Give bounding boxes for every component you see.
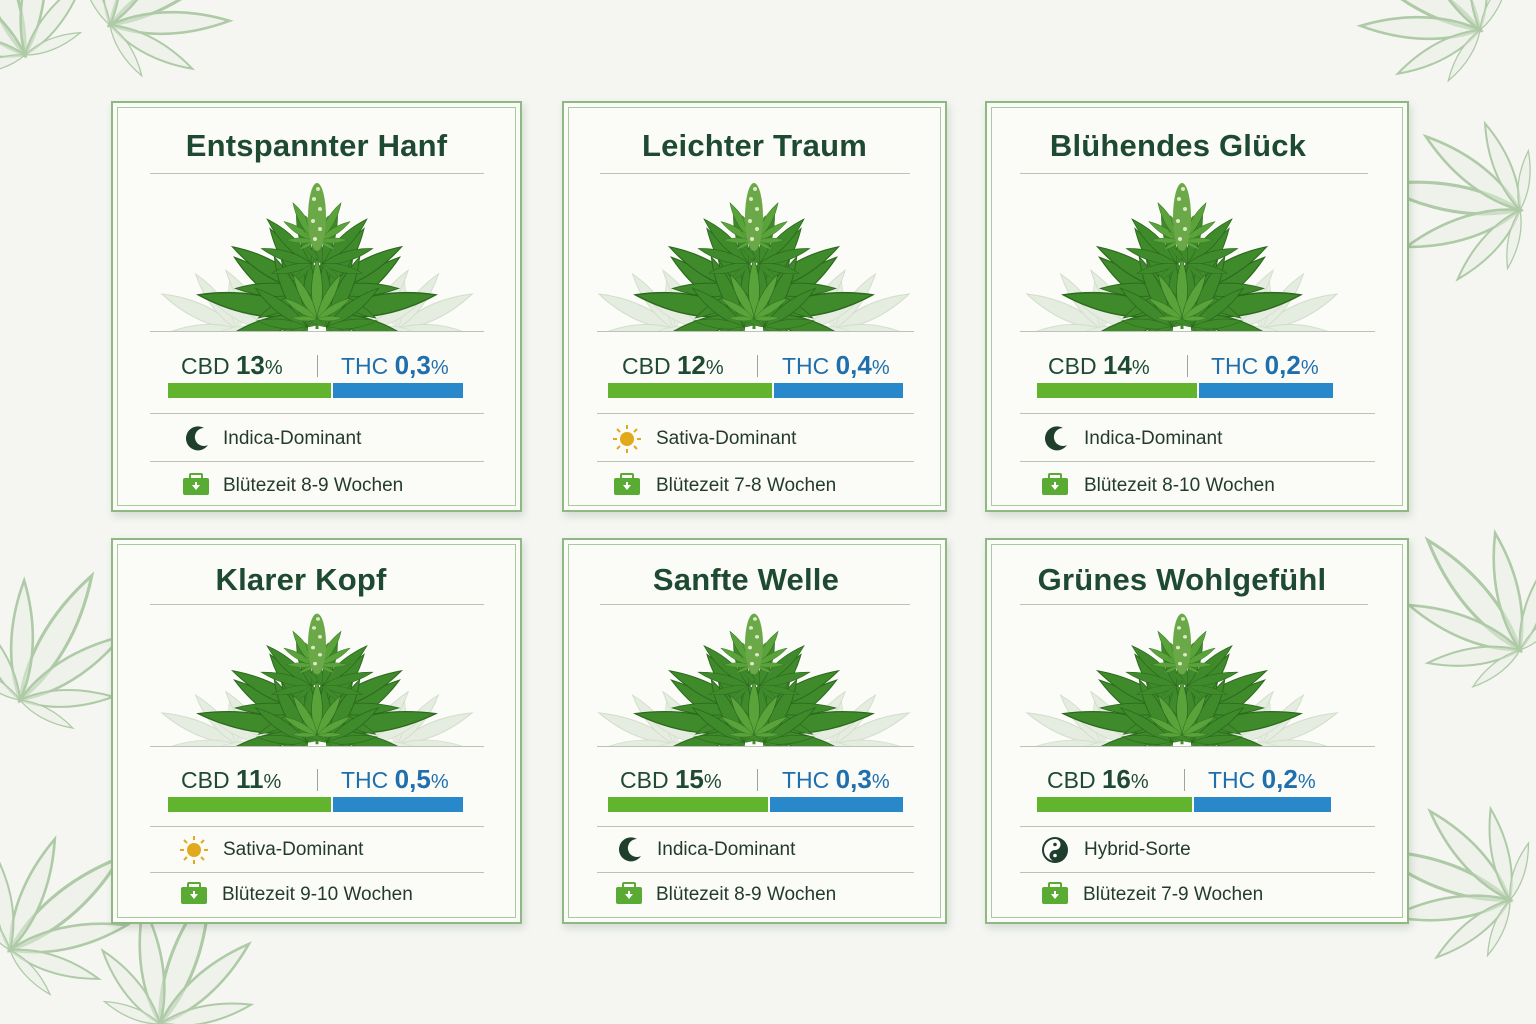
type row [619, 837, 796, 862]
flowering row: Blütezeit 7-8 Wochen [656, 475, 836, 496]
card: Grünes Wohlgefühl [984, 538, 1414, 931]
type row [1045, 426, 1222, 450]
plant [160, 183, 474, 331]
stats: CBD 13% [181, 350, 283, 380]
card: Sanfte Welle [561, 538, 952, 931]
card: Klarer Kopf: THC 0,5% [341, 764, 449, 794]
stats: CBD 16% [1047, 764, 1149, 794]
title: Klarer Kopf [215, 562, 386, 597]
stats: CBD 11% [181, 764, 281, 794]
flowering row: Blütezeit 8-9 Wochen [223, 475, 403, 496]
card: Sanfte Welle: THC 0,3% [782, 764, 890, 794]
stats: CBD 14% [1048, 350, 1150, 380]
card: Entspannter Hanf [110, 101, 1330, 519]
type row: Indica-Dominant [657, 839, 795, 860]
title: Grünes Wohlgefühl [1038, 562, 1326, 597]
type row [180, 836, 364, 864]
title: Sanfte Welle [653, 562, 839, 597]
plant [1026, 614, 1338, 746]
flowering row: Blütezeit 9-10 Wochen [222, 884, 413, 905]
title: Entspannter Hanf [186, 128, 447, 163]
type row [613, 425, 796, 453]
bar [608, 797, 903, 812]
card: Klarer Kopf [110, 538, 1312, 931]
type row: Indica-Dominant [223, 428, 361, 449]
plant [160, 614, 474, 746]
card: Blühendes Glück: THC 0,2% [1211, 350, 1319, 380]
plant [598, 614, 910, 746]
card: Blühendes Glück [984, 101, 1414, 519]
flowering row: Blütezeit 8-9 Wochen [656, 884, 836, 905]
card: Leichter Traum [561, 101, 952, 519]
type row: Sativa-Dominant [656, 428, 796, 449]
plant [1026, 183, 1338, 331]
flowering row: Blütezeit 7-9 Wochen [1083, 884, 1263, 905]
stats: CBD 12% [622, 350, 724, 380]
type row [1042, 837, 1191, 863]
type row: Sativa-Dominant [223, 839, 363, 860]
bar [168, 797, 463, 812]
bar [168, 383, 463, 398]
title: Leichter Traum [642, 128, 867, 163]
plant [598, 183, 910, 331]
flowering row: Blütezeit 8-10 Wochen [1084, 475, 1275, 496]
title: Blühendes Glück [1050, 128, 1306, 163]
card: Grünes Wohlgefühl: THC 0,2% [1208, 764, 1316, 794]
card: Leichter Traum: THC 0,4% [782, 350, 890, 380]
bar [608, 383, 903, 398]
type row: Hybrid-Sorte [1084, 839, 1191, 860]
stats: CBD 15% [620, 764, 722, 794]
bar [1037, 383, 1333, 398]
type row: Indica-Dominant [1084, 428, 1222, 449]
type row [186, 426, 362, 450]
bar [1037, 797, 1331, 812]
card: Entspannter Hanf: THC 0,3% [341, 350, 449, 380]
